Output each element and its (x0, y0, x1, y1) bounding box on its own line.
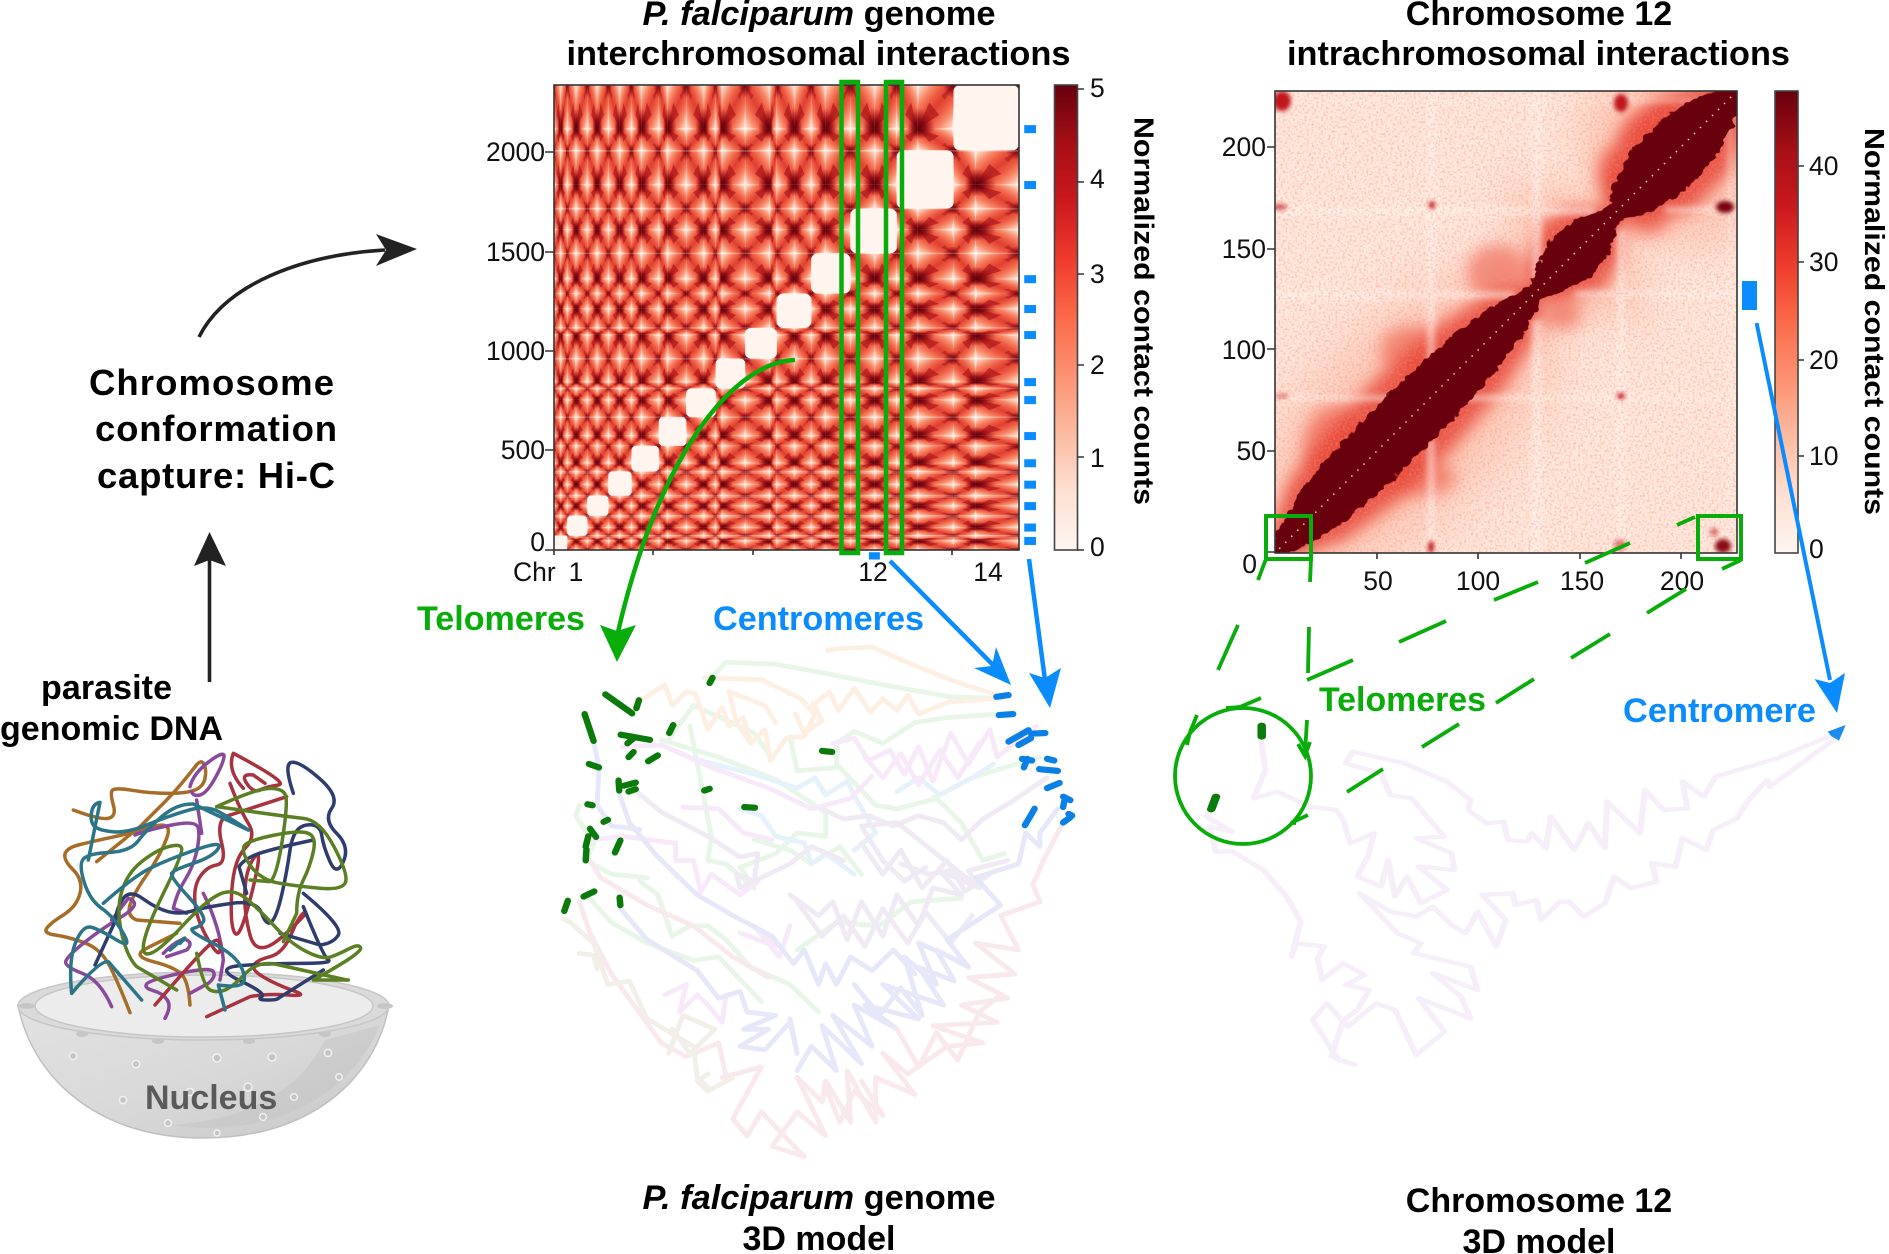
axis labels: chromosome 12 y axis: 200 (1222, 132, 1266, 162)
axis labels: chromosome 12 y axis: 100 (1222, 335, 1266, 365)
colorbar: genome heatmap: 1 (1090, 443, 1105, 473)
colorbar: chromosome 12 heatmap: 0 (1809, 534, 1824, 564)
axis labels: genome heatmap y axis: 2000 (486, 137, 545, 167)
label: Chromosome conformation capture: Hi-C: capture: Hi-C (97, 455, 335, 496)
axis labels: chromosome 12 x axis: 100 (1456, 566, 1500, 596)
axis labels: chromosome 12 y axis (1222, 132, 1266, 579)
centromere markers: genome heatmap (869, 125, 1036, 560)
diagonal intrachromosomal blocks (554, 85, 1019, 550)
arrow: curved, Hi-C to heatmap (199, 234, 417, 337)
colorbar: chromosome 12 heatmap (1775, 91, 1838, 564)
axis labels: chromosome 12 x axis: 200 (1660, 566, 1704, 596)
arrow: centromeres from y markers to model (1029, 559, 1061, 708)
axis labels: chromosome 12 y axis: 150 (1222, 234, 1266, 264)
arrow: vertical, DNA to Hi-C (194, 532, 226, 682)
centromere tubes: genome model (996, 695, 1072, 825)
caption: genome 3D model (642, 1179, 996, 1254)
caption: genome 3D model: P. falciparum genome (642, 1179, 996, 1217)
axis labels: genome heatmap y axis (486, 137, 545, 557)
label: Telomeres: Telomeres (417, 600, 585, 638)
axis labels: chromosome 12 y axis: 0 (1242, 549, 1257, 579)
axis labels: chromosome 12 x axis (1363, 566, 1704, 596)
strand: red (155, 753, 306, 1017)
label: Centromeres: Centromeres (713, 600, 924, 638)
axes: genome heatmap frame and ticks (545, 85, 1019, 555)
colorbar: chromosome 12 heatmap: 30 (1809, 247, 1838, 277)
label: parasite genomic DNA: genomic DNA (0, 710, 223, 748)
axis labels: chromosome numbers: 12 (858, 557, 888, 587)
title: chromosome 12 intrachromosomal interactions: intrachromosomal interactions (1287, 35, 1790, 73)
colorbar: chromosome 12 heatmap: 10 (1809, 441, 1838, 471)
axis labels: chromosome numbers: Chr (513, 557, 556, 587)
heatmap: chromosome 12 Hi-C contact map (1276, 92, 1736, 552)
axis labels: genome heatmap y axis: 1000 (486, 336, 545, 366)
colorbar: genome heatmap: 2 (1090, 350, 1105, 380)
strand: green (119, 788, 361, 992)
centromere marker: chromosome 12 (1742, 281, 1757, 310)
label: Nucleus: Nucleus (145, 1079, 277, 1117)
telomere tubes: genome model (564, 678, 832, 911)
caption: chromosome 12 3D model: Chromosome 12 (1406, 1182, 1672, 1220)
light crossing bands (1275, 91, 1737, 553)
axis labels: chromosome 12 y axis: 50 (1237, 436, 1266, 466)
telomere highlight boxes: chromosome 12 heatmap (1266, 516, 1741, 559)
title: genome interchromosomal interactions (566, 0, 1070, 73)
colorbar label: genome heatmap: Normalized contact counts (1128, 117, 1160, 505)
colorbar: genome heatmap: 0 (1090, 532, 1105, 562)
3D model: whole genome (563, 647, 1072, 1157)
axes: chromosome 12 heatmap frame and ticks (1267, 91, 1737, 559)
axis labels: genome heatmap y axis: 0 (530, 527, 545, 557)
axis labels: chromosome numbers: 14 (973, 557, 1003, 587)
arrow: centromeres from x axis to model (890, 561, 1011, 685)
strand: brown (46, 762, 206, 1013)
colorbar: chromosome 12 heatmap: 20 (1809, 345, 1838, 375)
illustration: tangled DNA strands (46, 753, 361, 1018)
telomere highlight boxes: genome heatmap (842, 82, 902, 553)
colorbar: genome heatmap: 3 (1090, 259, 1105, 289)
arrow: telomeres from heatmap to model (600, 360, 795, 662)
label: Chromosome conformation capture: Hi-C (89, 362, 337, 496)
illustration: nucleus bowl (18, 972, 393, 1138)
colorbar: genome heatmap: 4 (1090, 164, 1105, 194)
caption: chromosome 12 3D model (1406, 1182, 1672, 1254)
label: Telomeres (chromosome 12): Telomeres (1319, 681, 1486, 719)
axis labels: chromosome 12 x axis: 150 (1560, 566, 1604, 596)
colorbar: genome heatmap: 5 (1090, 73, 1105, 103)
axis labels: chromosome numbers (513, 557, 1003, 587)
title: genome interchromosomal interactions: interchromosomal interactions (566, 35, 1070, 73)
label: parasite genomic DNA: parasite (41, 669, 172, 707)
axis labels: chromosome 12 x axis: 50 (1363, 566, 1393, 596)
axis labels: genome heatmap y axis: 1500 (486, 237, 545, 267)
colorbar: chromosome 12 heatmap: 40 (1809, 151, 1838, 181)
title: chromosome 12 intrachromosomal interactions (1287, 0, 1790, 73)
strand: navy (95, 762, 346, 1000)
label: Chromosome conformation capture: Hi-C: Chromosome (89, 362, 334, 403)
label: Centromere: Centromere (1623, 692, 1816, 730)
strand: teal (71, 802, 248, 1010)
strand: purple (66, 754, 224, 1018)
label: parasite genomic DNA (0, 669, 223, 748)
label: Chromosome conformation capture: Hi-C: conformation (95, 408, 337, 449)
3D model: chromosome 12 (1207, 725, 1846, 1065)
dashed zoom lines: telomere boxes to circle (1175, 517, 1741, 844)
arrow: centromere from marker to chromosome 12 model (1757, 323, 1845, 713)
colorbar: genome heatmap (1054, 73, 1105, 562)
heatmap: genome-wide Hi-C contact map (554, 85, 1019, 550)
axis labels: genome heatmap y axis: 500 (501, 435, 545, 465)
axis labels: chromosome numbers: 1 (569, 557, 583, 587)
telomere tubes: chromosome 12 model (1211, 726, 1262, 809)
centromere tip: chromosome 12 model (1828, 725, 1846, 741)
